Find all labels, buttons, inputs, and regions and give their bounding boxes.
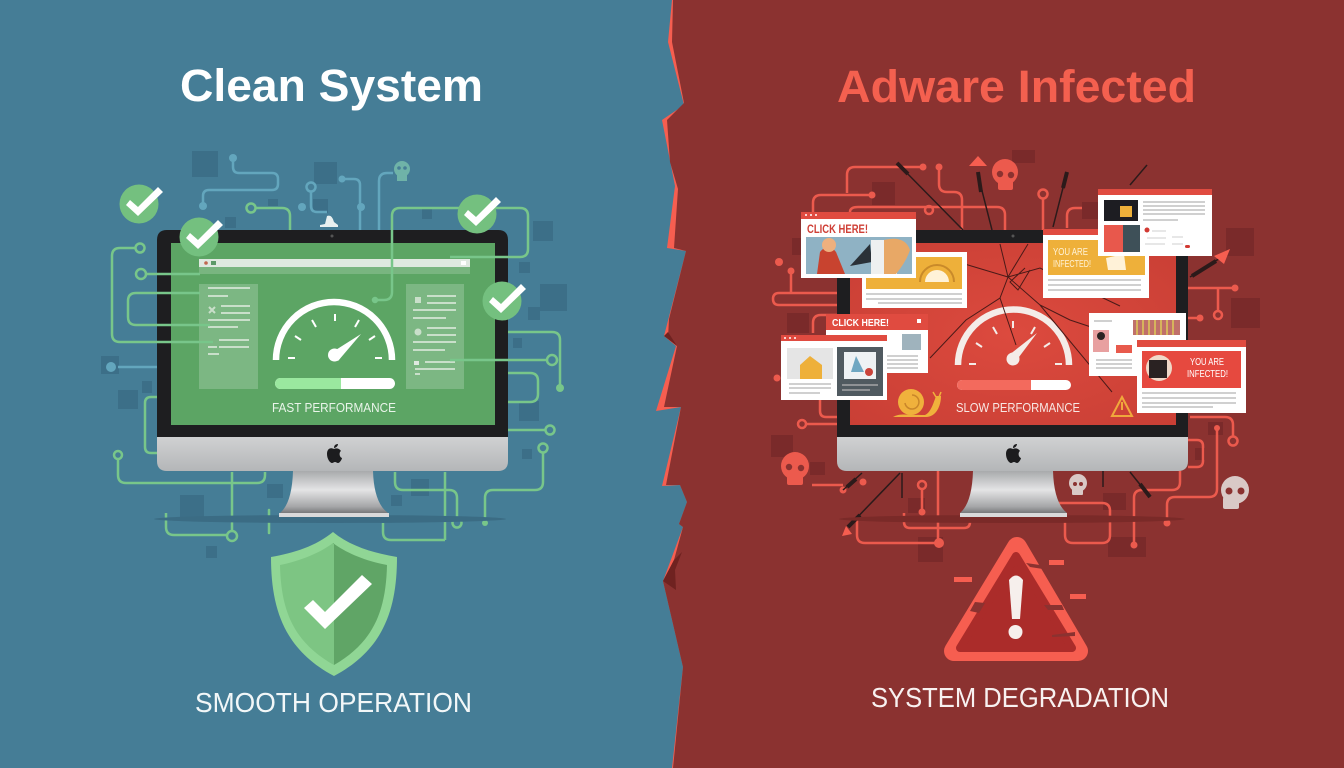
icon: skull left [781,452,809,485]
monitor chin [157,437,508,471]
icon: snail [893,389,941,417]
popup: click here lower [826,314,928,373]
icon: skull bottom small [1069,474,1087,495]
screen: green [171,243,495,425]
popup: yellow gauge ad [862,252,967,308]
circuit traces: clean side blue [106,154,393,372]
icon: shield [271,532,397,676]
panel: clean system background [0,0,690,768]
screen cracks [930,244,1120,392]
icon: warning triangle large [954,547,1086,651]
monitor: infected system [837,230,1188,523]
circuit traces: clean side green behind monitor [114,204,564,541]
attack arrows [842,156,1230,536]
caption: system degradation: SYSTEM DEGRADATION [871,682,1169,713]
popup: you are infected yellow: INFECTED! [1053,258,1091,270]
popup: click here lower: CLICK HERE! [832,317,889,329]
right content panel [406,284,464,389]
monitor stand [154,471,506,523]
monitor bezel [837,230,1188,437]
popup: collage [1089,313,1186,376]
progress bar [957,380,1071,390]
popup: click here top [801,212,916,278]
icon: skull top [992,159,1018,190]
label: fast performance: FAST PERFORMANCE [272,400,396,415]
left content panel [199,284,258,389]
icon: camera [1012,234,1014,238]
speedometer gauge [276,302,392,362]
icon: skull bottom right [1221,476,1249,509]
icon: check badge 3 [458,194,501,234]
monitor: clean system [154,230,508,523]
popup: top right article [1098,189,1212,256]
popup: you are infected yellow: YOU ARE [1053,246,1088,258]
progress bar [275,378,395,389]
icon: camera [330,234,334,238]
monitor bezel [157,230,508,437]
icon: small white mark above monitor [320,216,338,227]
icon: logo [1006,444,1021,463]
popup: you are infected red: INFECTED! [1187,369,1228,380]
panel: infected background with torn edge [656,0,1344,768]
icon: logo [327,444,342,463]
speedometer gauge [958,310,1069,366]
popup: you are infected red [1137,340,1246,413]
circuit traces: infected side [773,164,1238,548]
browser bar [199,259,470,274]
label: slow performance: SLOW PERFORMANCE [956,400,1080,415]
popup: click here top: CLICK HERE! [807,222,868,236]
popup: you are infected red: YOU ARE [1190,357,1224,368]
background squares: infected side [771,150,1260,562]
popup: home card [781,335,887,400]
caption: smooth operation: SMOOTH OPERATION [195,687,472,718]
icon: small skull clean side [394,161,410,181]
icon: warning triangle [1112,397,1132,416]
icon: check badge 4 [482,282,526,320]
circuit traces: green overlay on screen [112,208,557,365]
icon: check badge 2 [180,218,223,256]
monitor chin [837,437,1188,471]
popup: you are infected yellow [1043,229,1149,298]
icon: check badge 1 [120,184,163,224]
title: Clean System: Clean System [180,60,483,111]
monitor stand [839,471,1185,523]
title: Adware Infected: Adware Infected [837,61,1196,112]
background squares: clean side [101,151,567,558]
screen: red [850,243,1176,425]
